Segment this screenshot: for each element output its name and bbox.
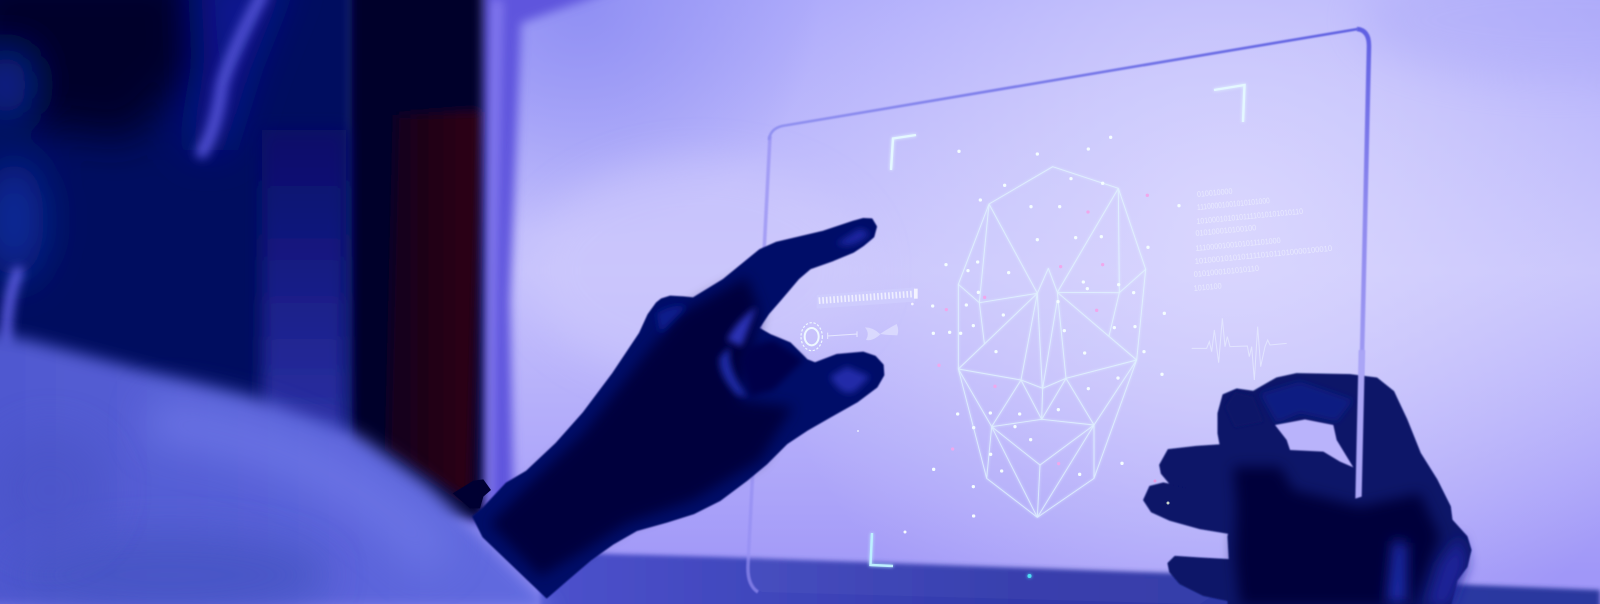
blurred white shoulder bbox=[0, 332, 556, 604]
transparent glass tablet bbox=[748, 29, 1369, 604]
wristwatch clasp bbox=[453, 479, 491, 508]
binary data readout: 010010000 bbox=[1197, 187, 1233, 199]
fabric highlight streaks bbox=[6, 0, 262, 345]
binary data readout: 0101000101010110 bbox=[1193, 264, 1260, 279]
cyan data point on the table bbox=[1028, 574, 1032, 578]
dark navy panel bbox=[0, 0, 352, 450]
corner bracket bottom left bbox=[870, 533, 893, 566]
HUD ring, connector and DNA icon bbox=[801, 323, 898, 351]
data points near the lower tablet corner bbox=[857, 430, 1170, 534]
binary data readout bbox=[1193, 187, 1333, 293]
right hand gripping the tablet bbox=[1144, 374, 1471, 604]
scattered data points bbox=[933, 137, 1179, 516]
corner bracket top right bbox=[1214, 85, 1244, 122]
right hand shading bbox=[1225, 382, 1467, 604]
gap between thumb and fingers bbox=[1275, 419, 1353, 467]
binary data readout: 1010100 bbox=[1193, 281, 1223, 293]
tablet right edge bbox=[1357, 29, 1369, 490]
blurred foreground: room and person bbox=[0, 0, 640, 604]
tablet top edge bbox=[769, 29, 1358, 140]
window frame strip bbox=[465, 0, 640, 540]
black hair shadow and blue glints bbox=[0, 0, 290, 280]
dark red doorway bbox=[345, 0, 483, 520]
binary data readout: 010100010100100 bbox=[1195, 223, 1257, 238]
heartbeat waveform bbox=[1192, 318, 1287, 380]
table surface bbox=[540, 552, 1600, 604]
left hand shading bbox=[490, 228, 870, 577]
corner bracket top left bbox=[891, 135, 916, 170]
tablet edge passing in front of the hand bbox=[1355, 350, 1365, 499]
binary data readout: 101000101010111101011010000100010 bbox=[1194, 244, 1333, 266]
binary data readout: 1110000100101011101000 bbox=[1195, 236, 1281, 253]
tablet left edge bbox=[748, 136, 770, 592]
HUD progress bar bbox=[817, 287, 918, 309]
binary data readout: 11100001001010101000 bbox=[1197, 196, 1271, 212]
left hand pointing at the tablet bbox=[473, 219, 883, 597]
binary data readout: 1010001010101111010101010110 bbox=[1196, 207, 1304, 226]
wireframe face mesh bbox=[958, 167, 1146, 517]
